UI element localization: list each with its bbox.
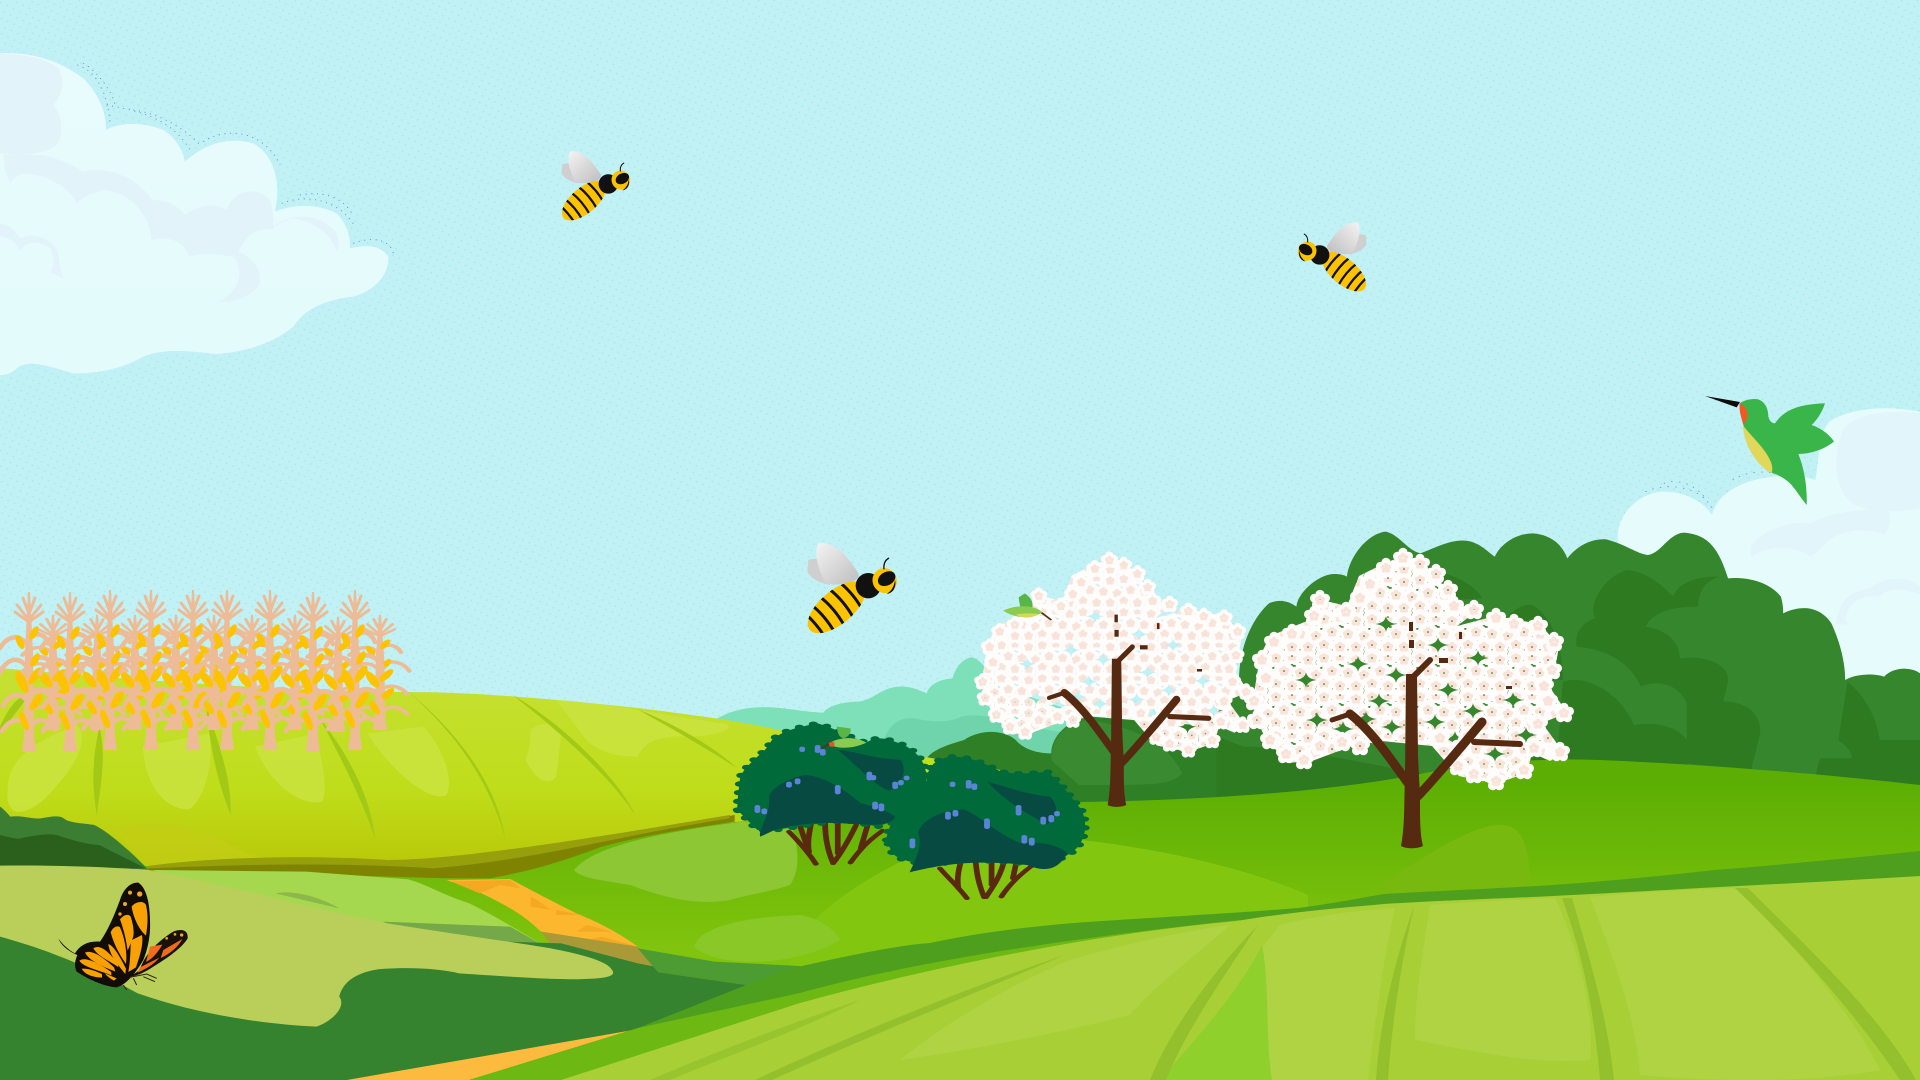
- cloud shading: [0, 54, 339, 302]
- hedge behind flowering trees: [927, 717, 1217, 827]
- fore wing: [58, 883, 150, 987]
- olive ridge strip: [148, 815, 735, 878]
- field furrows: [650, 888, 1916, 1080]
- bee upper left: [554, 151, 634, 229]
- cloud edge dots: [1645, 472, 1774, 508]
- small hummingbird on bush: [822, 727, 866, 748]
- corn field: [0, 590, 409, 752]
- right cloud: [1618, 408, 1920, 713]
- pale olive lawn: [0, 866, 613, 1027]
- bush foliage: [737, 723, 1085, 864]
- throat: [1740, 403, 1748, 425]
- background hedge, right: [1200, 532, 1920, 813]
- flowering tree, small: [972, 550, 1257, 807]
- large bee centre: [798, 543, 901, 645]
- bright band: [638, 948, 806, 994]
- body and wings: [1739, 399, 1834, 505]
- road: [347, 1028, 643, 1080]
- field back band: [469, 851, 1920, 1080]
- flowering tree, large: [1242, 546, 1577, 848]
- hill furrow lines: [0, 692, 737, 838]
- back row corn: [22, 615, 409, 732]
- field light blocks: [900, 888, 1880, 1080]
- mint distant hills: [706, 657, 1102, 773]
- blue flowers: [757, 747, 1057, 847]
- yellow-green corn hill: [0, 668, 1000, 890]
- butterfly: [58, 883, 188, 990]
- front field: [469, 851, 1920, 1080]
- orange dirt path: [446, 879, 658, 972]
- hedge lighter lobe: [1051, 720, 1182, 785]
- bush stems: [789, 810, 1033, 898]
- cloud body: [0, 53, 388, 375]
- small hummingbird near tree: [1003, 593, 1051, 620]
- field bright patch: [1160, 945, 1272, 1080]
- beak: [1705, 396, 1740, 407]
- light grass patches: [574, 822, 798, 902]
- hedge shading: [1200, 570, 1920, 813]
- butterfly body and legs: [123, 974, 157, 990]
- hill warm shadow: [115, 823, 290, 870]
- belly: [1743, 425, 1772, 473]
- hill light patches: [7, 700, 729, 812]
- left cloud: [0, 48, 393, 380]
- middle bright green hill: [140, 760, 1920, 1010]
- field main: [561, 876, 1920, 1080]
- blueberry bushes: [737, 593, 1085, 898]
- bush dark clusters: [760, 750, 1067, 872]
- cloud edge dots: [77, 63, 393, 253]
- front row corn: [0, 590, 383, 752]
- dark hedge, left: [0, 807, 148, 869]
- bee upper right: [1294, 222, 1374, 300]
- light green strip: [153, 870, 548, 960]
- large hummingbird: [1705, 396, 1834, 505]
- cloud shading: [1751, 412, 1920, 625]
- lower-left terrain: [0, 807, 806, 1080]
- dark green foreground slope: [0, 927, 800, 1080]
- field bright strip: [469, 920, 1240, 1080]
- hind wing: [130, 930, 188, 977]
